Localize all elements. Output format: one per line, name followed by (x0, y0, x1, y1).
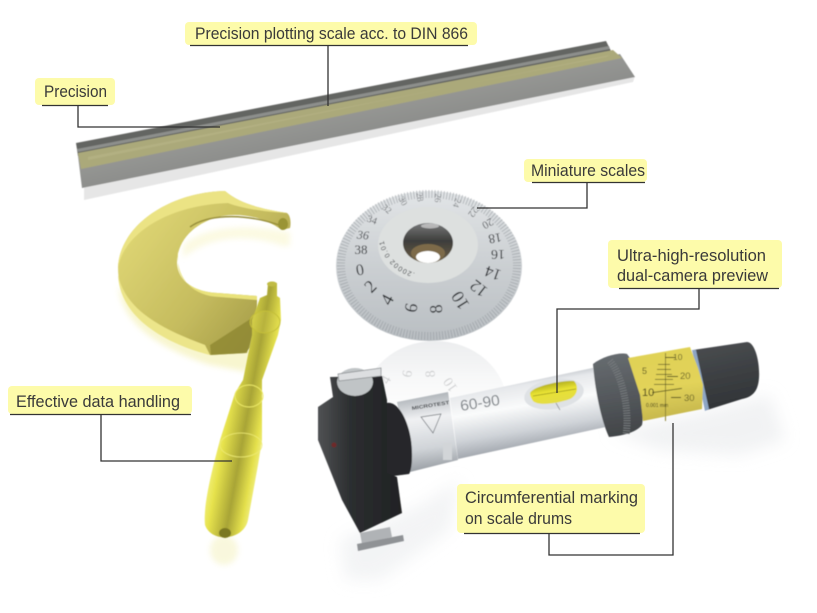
right dark knob (693, 342, 759, 410)
label: dual-camera preview (557, 240, 782, 393)
drum scale: 20 (680, 371, 691, 382)
miniature dial scale: 28 (414, 192, 426, 203)
drum scale: 10 (673, 352, 683, 362)
ruler: precision plotting scale (76, 41, 635, 200)
miniature dial scale: 12 (466, 276, 491, 301)
brand: MICROTEST (411, 400, 450, 412)
miniature dial scale: 24 (451, 197, 463, 209)
disc reflection: 10 (441, 374, 461, 394)
disc reflection (363, 341, 507, 469)
miniature dial scale: 26 (433, 193, 443, 203)
black body (318, 376, 402, 533)
miniature dial scale: 38 (354, 242, 368, 257)
label: circumferential marking: on scale drums (465, 510, 572, 528)
C-frame reflections (118, 227, 290, 372)
inside micrometer (318, 342, 759, 551)
miniature dial scale: 20 (479, 215, 495, 231)
miniature dial scale: 2 (360, 276, 381, 297)
miniature dial scale: 30 (396, 195, 410, 208)
text 60-90: 60-90 (459, 392, 501, 415)
miniature dial scale: 36 (355, 227, 370, 242)
yellow drum (628, 347, 703, 421)
label: effective data handling: Effective data handling (16, 393, 180, 411)
miniature dial scale: .20002 0.01 (379, 240, 415, 276)
label: precision plotting scale: Precision plotting scale acc. to DIN 866 (195, 25, 468, 43)
tube (450, 367, 615, 459)
miniature dial scale: 16 (491, 246, 505, 261)
miniature dial scale: 8 (426, 304, 446, 314)
disc reflection: 4 (378, 373, 395, 387)
miniature dial scale: 14 (483, 262, 504, 283)
drum scale: 5 (642, 366, 647, 376)
label: dual-camera preview: dual-camera preview (617, 267, 768, 285)
drum scale: 10 (642, 387, 654, 399)
inside micrometer reflection (340, 395, 785, 580)
brand (411, 400, 450, 433)
miniature dial scale: 34 (365, 214, 378, 227)
top knob (337, 368, 381, 396)
label: precision: Precision (44, 83, 107, 101)
bottom knob (357, 527, 404, 551)
label: dual-camera preview: Ultra-high-resolution (617, 247, 766, 265)
spindle reflection (210, 535, 238, 565)
dark ring (593, 353, 643, 437)
miniature dial scale: 0 (355, 261, 366, 280)
label: precision (35, 78, 220, 127)
label: miniature scales: Miniature scales (531, 162, 645, 180)
label: effective data handling (8, 386, 232, 461)
miniature dial scale (336, 190, 522, 342)
miniature dial scale: 4 (376, 291, 398, 308)
yellow spindle (205, 282, 281, 538)
miniature dial scale: 32 (380, 202, 394, 216)
miniature dial scale: 18 (487, 230, 503, 247)
label: precision plotting scale (185, 22, 477, 106)
collar (397, 392, 458, 472)
black cylinder (386, 403, 412, 477)
label: miniature scales (477, 159, 647, 208)
drum scale: 30 (684, 393, 695, 404)
miniature dial scale: 22 (465, 204, 480, 219)
drum scale (642, 352, 695, 421)
label: circumferential marking (457, 423, 673, 555)
window (522, 374, 586, 414)
disc reflection: 8 (423, 370, 439, 378)
disc reflection: 6 (400, 369, 416, 379)
miniature dial scale: 6 (400, 302, 422, 314)
drum scale: 0.001 mm (646, 403, 668, 409)
label: circumferential marking: Circumferential marking (465, 489, 638, 507)
miniature dial scale: 10 (447, 288, 473, 313)
yellow C-frame of micrometer (118, 191, 291, 355)
